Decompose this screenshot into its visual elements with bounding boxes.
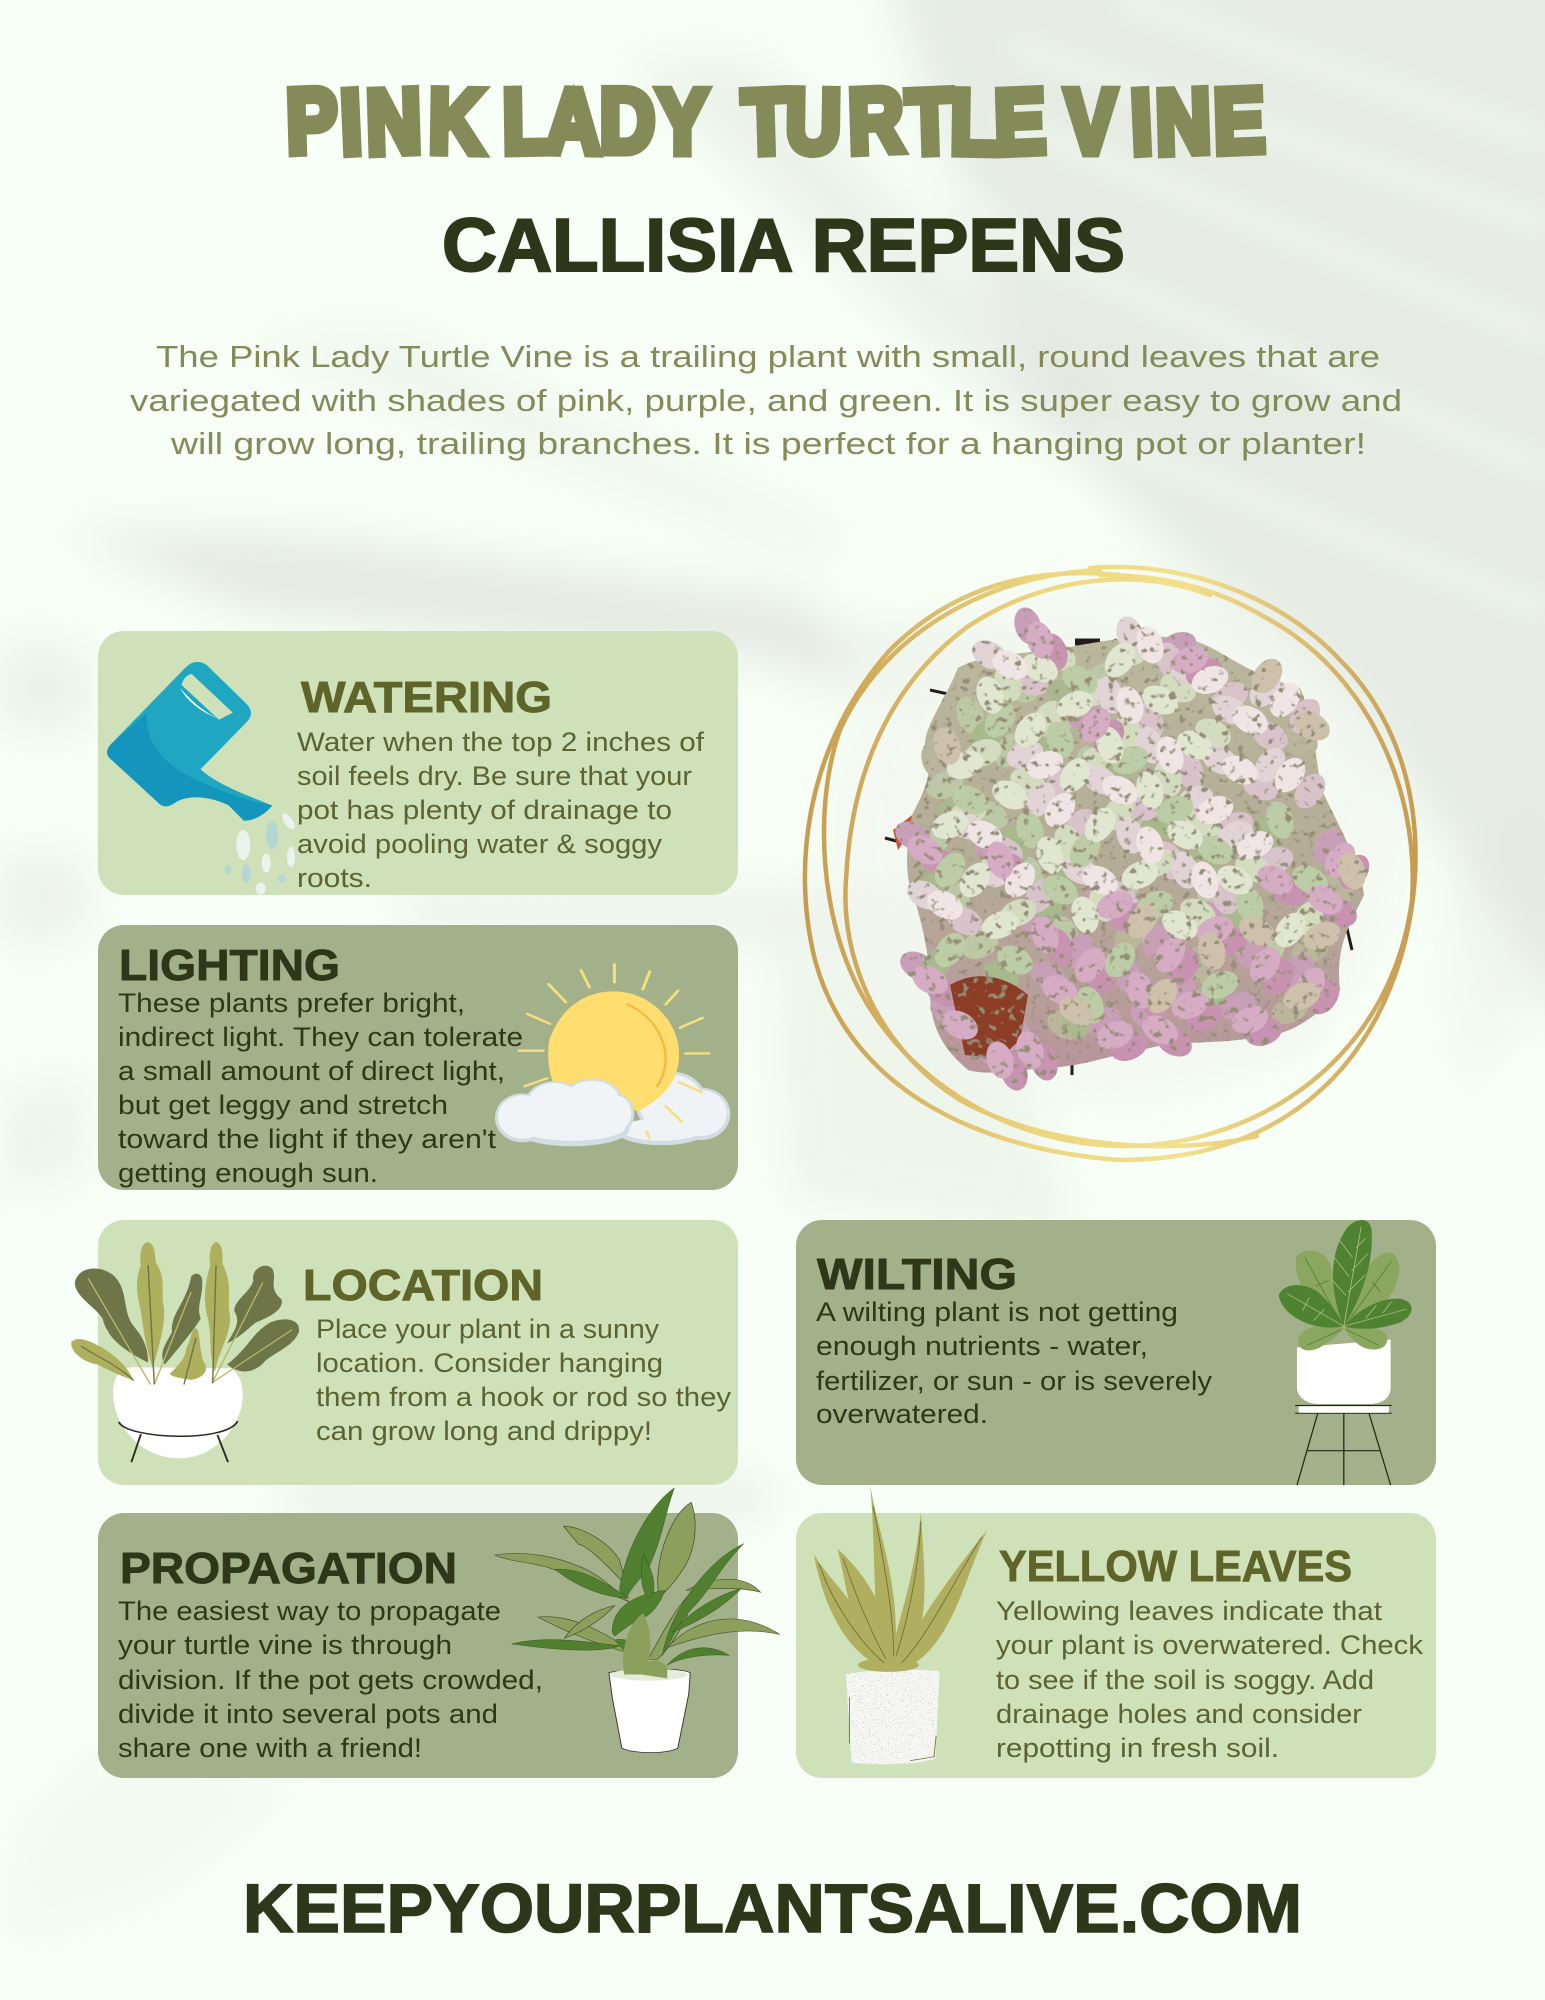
body text: getting enough sun. [118, 1158, 378, 1188]
icon: sun and cloud [495, 964, 730, 1146]
body text [996, 1596, 1424, 1763]
body text: fertilizer, or sun - or is severely [816, 1366, 1213, 1396]
icon: potted leafy plant [495, 1488, 780, 1753]
intro paragraph [130, 339, 1402, 461]
icon: plant on stool [1279, 1220, 1412, 1485]
body text: Place your plant in a sunny [316, 1314, 660, 1344]
plant photo illustration [885, 604, 1376, 1094]
body text: share one with a friend! [118, 1733, 422, 1763]
stakes and stems [885, 640, 1352, 1075]
panel: location [71, 1220, 738, 1485]
heading: YELLOW LEAVES [999, 1542, 1352, 1591]
body text: pot has plenty of drainage to [297, 795, 672, 825]
body text: avoid pooling water & soggy [297, 829, 663, 859]
body text [118, 1596, 543, 1763]
subtitle: CALLISIA REPENS [442, 203, 1125, 287]
panel: lighting [98, 925, 738, 1190]
icon: watering can [107, 662, 297, 894]
body text: but get leggy and stretch [118, 1090, 448, 1120]
body text: your plant is overwatered. Check [996, 1630, 1424, 1660]
footer url: KEEPYOURPLANTSALIVE.COM [243, 1870, 1302, 1947]
body text [816, 1297, 1213, 1429]
body text: your turtle vine is through [118, 1630, 452, 1660]
heading: WILTING [817, 1250, 1017, 1299]
body text: soil feels dry. Be sure that your [297, 761, 692, 791]
body text: them from a hook or rod so they [316, 1382, 732, 1412]
body text: overwatered. [816, 1399, 988, 1429]
body text: These plants prefer bright, [118, 988, 465, 1018]
body text: divide it into several pots and [118, 1699, 498, 1729]
panel: propagation [98, 1488, 780, 1778]
body text: The easiest way to propagate [118, 1596, 501, 1626]
body text: toward the light if they aren't [118, 1124, 497, 1154]
heading: WATERING [301, 673, 552, 722]
heading: PROPAGATION [120, 1544, 457, 1593]
body text: can grow long and drippy! [316, 1416, 652, 1446]
body text: location. Consider hanging [316, 1348, 663, 1378]
heading: LOCATION [303, 1261, 543, 1310]
panel: watering [98, 631, 738, 895]
body text [118, 988, 523, 1188]
body text: drainage holes and consider [996, 1699, 1362, 1729]
gold scribble ring [805, 567, 1416, 1160]
heading: LIGHTING [119, 941, 340, 990]
intro paragraph: The Pink Lady Turtle Vine is a trailing plant with small, round leaves that are [156, 339, 1380, 374]
intro paragraph: will grow long, trailing branches. It is perfect for a hanging pot or planter! [170, 426, 1366, 461]
intro paragraph: variegated with shades of pink, purple, and green. It is super easy to grow and [130, 383, 1402, 418]
body text: a small amount of direct light, [118, 1056, 505, 1086]
body text: division. If the pot gets crowded, [118, 1665, 543, 1695]
body text: roots. [297, 863, 372, 893]
title: PINK LADY TURTLE VINE [285, 68, 1266, 173]
body text: indirect light. They can tolerate [118, 1022, 523, 1052]
icon: bowl plant on stand [71, 1242, 299, 1462]
body text [297, 727, 705, 893]
panel: yellow leaves [796, 1485, 1436, 1778]
body text: to see if the soil is soggy. Add [996, 1665, 1374, 1695]
body text [316, 1314, 732, 1446]
body text: Yellowing leaves indicate that [996, 1596, 1383, 1626]
panel: wilting [796, 1220, 1436, 1485]
icon: spiky plant in speckled pot [814, 1485, 987, 1764]
body text: Water when the top 2 inches of [297, 727, 705, 757]
body text: enough nutrients - water, [816, 1331, 1148, 1361]
body text: A wilting plant is not getting [816, 1297, 1178, 1327]
body text: repotting in fresh soil. [996, 1733, 1279, 1763]
